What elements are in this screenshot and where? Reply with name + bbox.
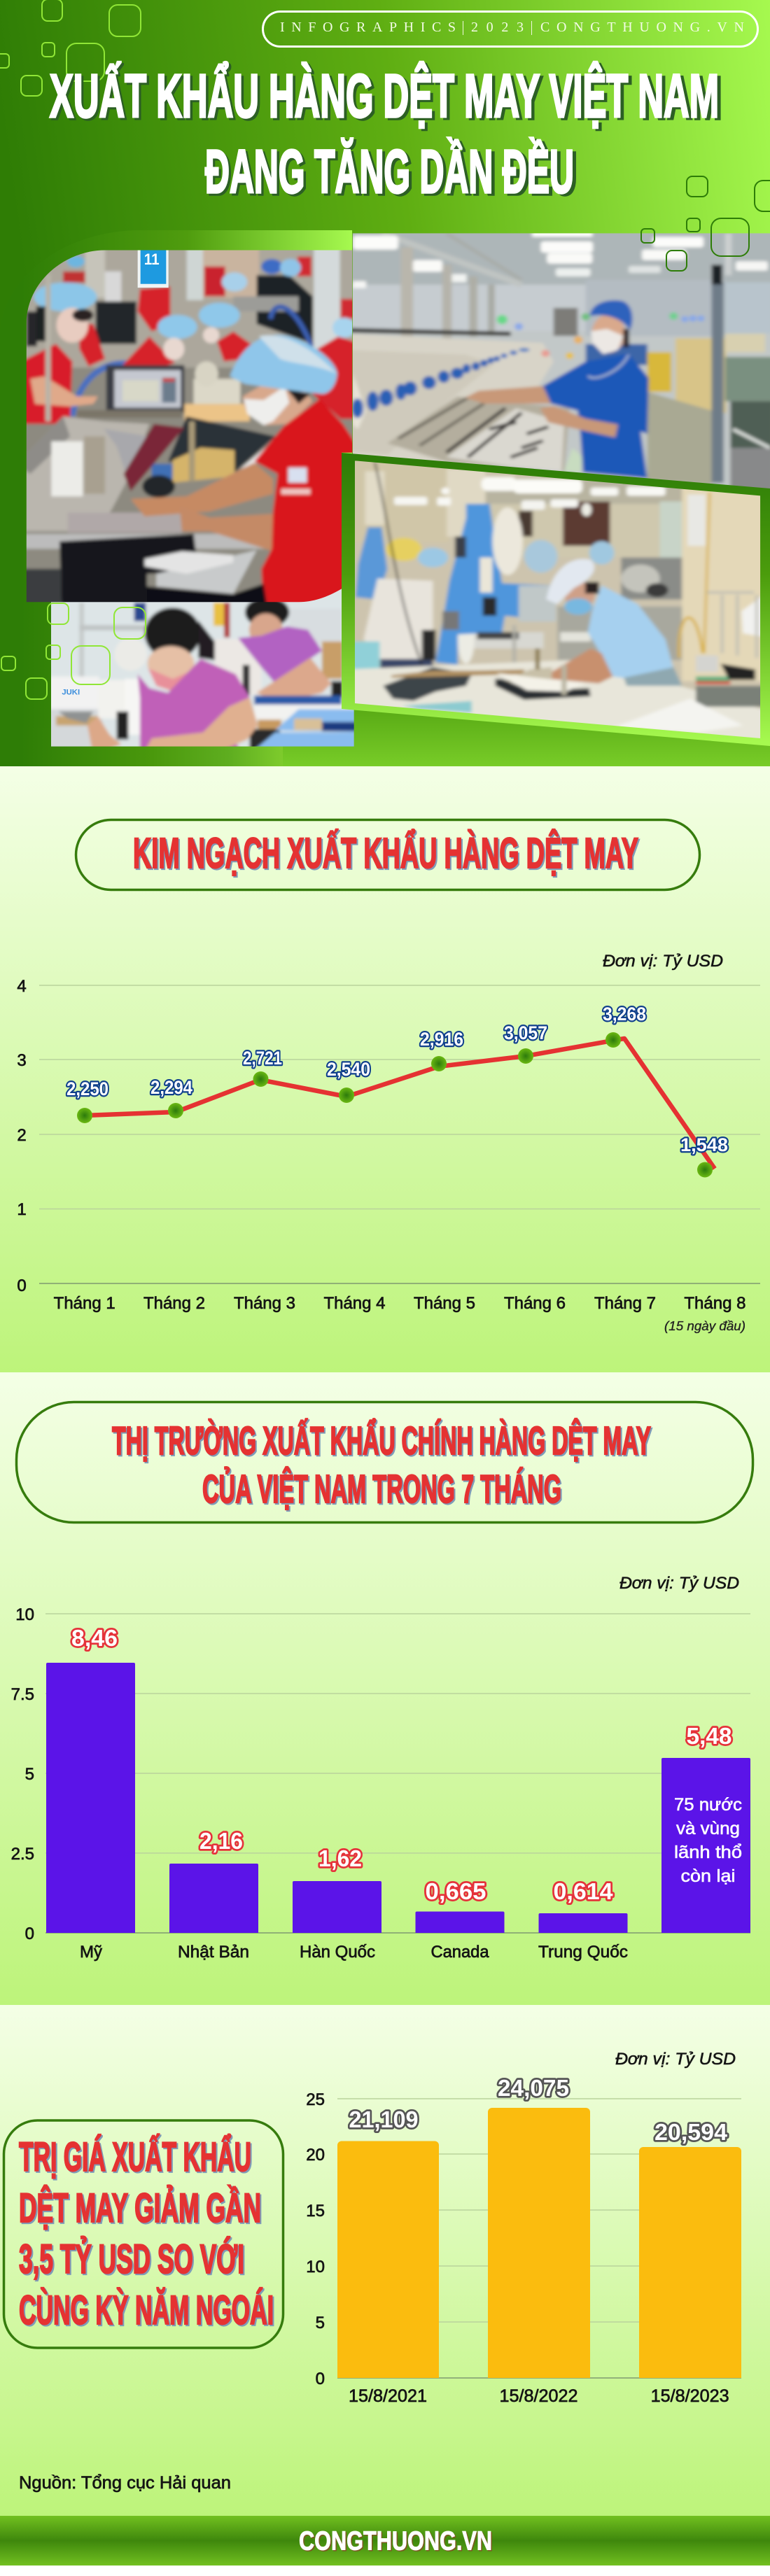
date labels: 15/8/2023 [651, 2386, 729, 2406]
bar value labels: 2,16 [200, 1828, 243, 1854]
y axis labels: 3 [17, 1051, 27, 1070]
bar value labels: 24,075 [498, 2075, 569, 2101]
photo: worker in red shirt at automated sewing machine [27, 251, 353, 602]
y axis labels: 20 [306, 2146, 325, 2165]
callout box: 3,5 TỶ USD SO VỚI [19, 2237, 244, 2282]
x axis labels: Tháng 5 [414, 1294, 475, 1313]
x axis labels [54, 1294, 746, 1313]
data value labels: 2,540 [327, 1059, 370, 1080]
bar value labels: 5,48 [686, 1723, 732, 1749]
y axis labels: 1 [17, 1200, 27, 1219]
remaining markets bar note: lãnh thổ [674, 1843, 742, 1862]
top pill: infographics tag: INFOGRAPHICS [280, 20, 456, 35]
country labels: Canada [431, 1943, 489, 1962]
data value labels: 2,250 [66, 1078, 108, 1099]
heading pill [76, 820, 700, 890]
photo: worker at blue cutting machine, tilted frame [342, 453, 770, 749]
y axis labels: 25 [306, 2090, 325, 2109]
main title [50, 62, 722, 208]
bar chart [11, 1605, 750, 1962]
top pill: infographics tag: 2023 [471, 20, 524, 35]
y axis labels: 0 [316, 2370, 325, 2388]
unit note: Đơn vị: Tỷ USD [615, 2050, 736, 2069]
x axis labels: Tháng 4 [323, 1294, 386, 1313]
data value labels [66, 1004, 728, 1155]
x axis labels: Tháng 2 [144, 1294, 205, 1313]
bar value labels: 0,665 [426, 1878, 486, 1904]
x axis labels: Tháng 8 [684, 1294, 746, 1313]
country labels: Trung Quốc [538, 1943, 628, 1962]
remaining markets bar note [674, 1795, 742, 1886]
date labels: 15/8/2022 [500, 2386, 578, 2406]
footer band [0, 2516, 770, 2566]
y axis labels [17, 977, 27, 1295]
y axis labels: 7.5 [11, 1685, 34, 1704]
left photo backing panel [0, 230, 352, 742]
x axis labels: Tháng 1 [54, 1294, 115, 1313]
bar value labels: 20,594 [654, 2119, 728, 2145]
bar value labels [71, 1625, 732, 1904]
data line [85, 1039, 715, 1169]
y axis labels: 0 [25, 1924, 34, 1943]
footer band: CONGTHUONG.VN [300, 2528, 493, 2557]
lower photo backing band [0, 728, 283, 766]
decorative rounded squares: lime, top-left and photo area [0, 0, 146, 699]
lower header band [283, 700, 770, 766]
line chart [17, 977, 760, 1333]
country labels: Nhật Bản [178, 1943, 249, 1962]
y axis labels: 5 [316, 2314, 325, 2332]
country labels: Mỹ [80, 1943, 102, 1962]
footer band: CONGTHUONG.VN [299, 2526, 492, 2556]
unit note: Đơn vị: Tỷ USD [603, 952, 723, 971]
bar value labels: 0,614 [553, 1878, 613, 1904]
section: main export markets bar chart [0, 1372, 770, 2005]
callout box: DỆT MAY GIẢM GẦN [19, 2186, 261, 2231]
y axis labels [11, 1605, 34, 1943]
decorative rounded squares: dark green, right side [641, 176, 770, 271]
data value labels: 1,548 [680, 1134, 728, 1155]
callout box: 3,5 TỶ USD SO VỚI [20, 2238, 246, 2283]
date labels [349, 2386, 729, 2406]
callout box: TRỊ GIÁ XUẤT KHẨU [20, 2136, 253, 2181]
y axis labels: 2 [17, 1126, 27, 1145]
data value labels: 2,294 [150, 1077, 192, 1098]
remaining markets bar note: còn lại [680, 1866, 735, 1886]
y axis labels: 2.5 [11, 1845, 34, 1864]
date labels: 15/8/2021 [349, 2386, 427, 2406]
header panel [0, 0, 770, 766]
data value labels: 2,721 [243, 1048, 282, 1069]
y axis labels: 15 [306, 2202, 325, 2220]
y axis labels: 10 [15, 1605, 34, 1624]
bar value labels: 8,46 [71, 1625, 118, 1651]
bar value labels [349, 2075, 728, 2145]
callout box [4, 2120, 283, 2348]
data value labels: 3,268 [603, 1004, 646, 1025]
photo sign [138, 250, 169, 288]
bars [46, 1663, 750, 1933]
section: year on year export value [0, 2005, 770, 2516]
top pill: infographics tag: CONGTHUONG.VN [540, 20, 744, 35]
top pill: infographics tag [263, 11, 757, 46]
data value labels: 3,057 [504, 1022, 547, 1043]
heading pill [17, 1402, 753, 1523]
bars [337, 2108, 741, 2378]
bar value labels: 1,62 [318, 1845, 362, 1871]
callout box: DỆT MAY GIẢM GẦN [20, 2187, 262, 2232]
y axis labels [306, 2090, 325, 2388]
month 8 footnote: (15 ngày đầu) [664, 1319, 746, 1333]
remaining markets bar note: và vùng [676, 1819, 740, 1838]
photo sign: 11 [144, 251, 160, 268]
y axis labels: 4 [17, 977, 27, 996]
country labels [80, 1943, 628, 1962]
country labels: Hàn Quốc [300, 1943, 375, 1962]
y axis labels: 0 [17, 1276, 27, 1295]
unit note: Đơn vị: Tỷ USD [620, 1574, 739, 1593]
data points [77, 1032, 713, 1177]
bar value labels: 21,109 [349, 2106, 419, 2132]
data value labels: 2,916 [420, 1029, 463, 1050]
y axis labels: 10 [306, 2258, 325, 2276]
callout box: CÙNG KỲ NĂM NGOÁI [20, 2289, 275, 2335]
callout box: CÙNG KỲ NĂM NGOÁI [19, 2288, 274, 2333]
machine brand label: JUKI [62, 689, 80, 697]
source note: Nguồn: Tổng cục Hải quan [19, 2473, 231, 2493]
photo: workers at sewing machines, background woman [51, 589, 354, 747]
x axis labels: Tháng 6 [504, 1294, 566, 1313]
photo content [354, 460, 760, 738]
x axis labels: Tháng 3 [234, 1294, 295, 1313]
y axis labels: 5 [25, 1765, 34, 1784]
remaining markets bar note: 75 nước [674, 1795, 742, 1815]
section: monthly textile export line chart [0, 766, 770, 1372]
callout box: TRỊ GIÁ XUẤT KHẨU [19, 2134, 251, 2180]
x axis labels: Tháng 7 [594, 1294, 656, 1313]
bar chart [306, 2075, 741, 2406]
photo: textile worker in blue uniform at spinning line [353, 233, 770, 488]
